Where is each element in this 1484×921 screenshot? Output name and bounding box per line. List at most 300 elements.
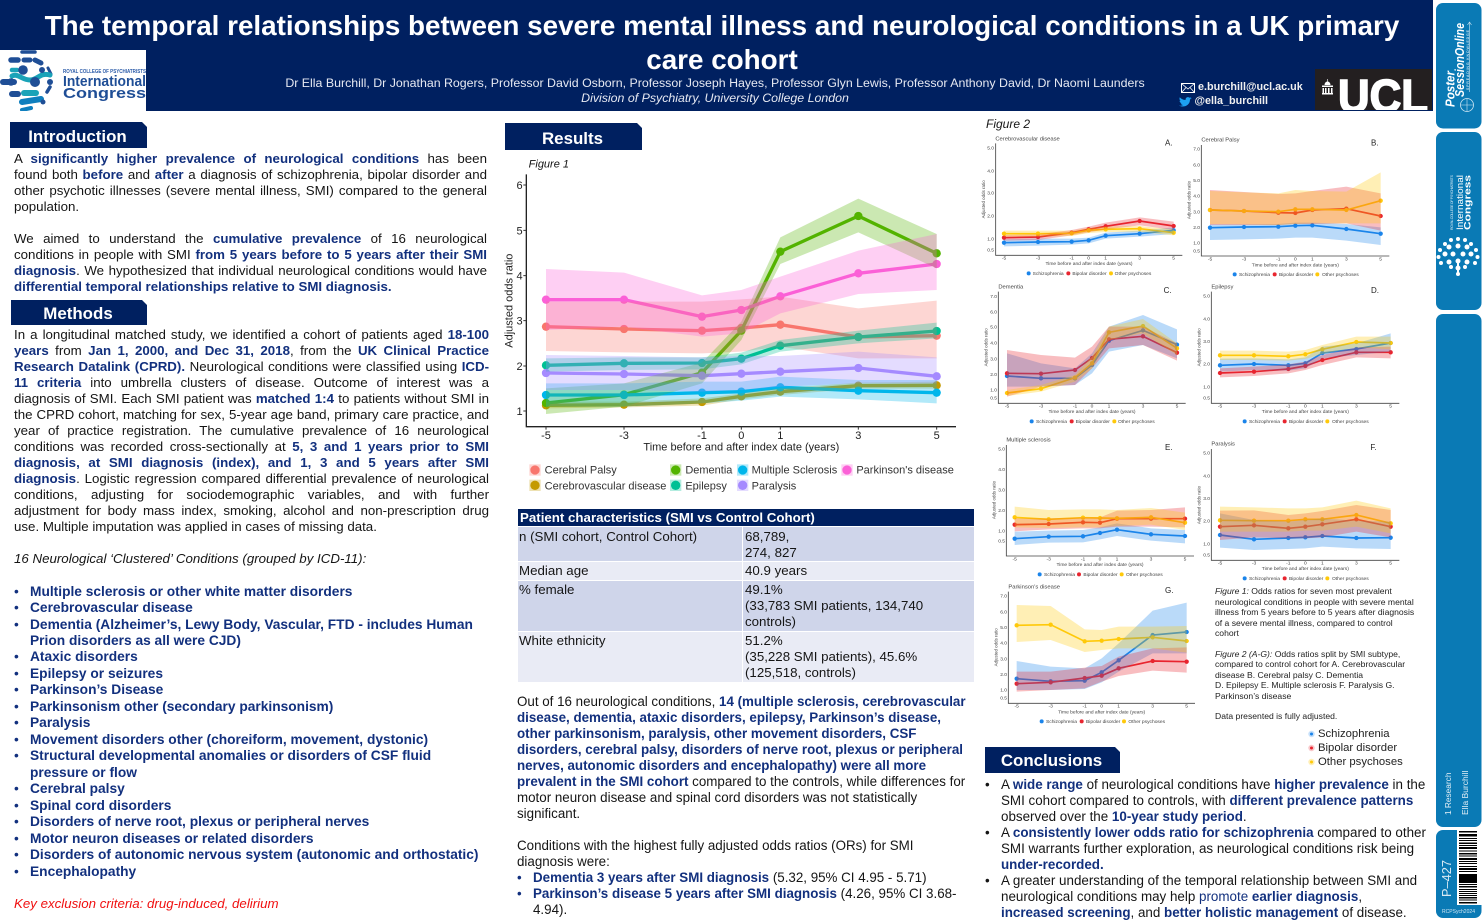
text block: introduction: We aimed to understand the cumulative prevalence of 16 neurological	[14, 231, 487, 246]
chart: G Parkinson's disease: Adjusted odds ratio	[993, 628, 998, 666]
text block: conclusions: A wide range of neurological conditions have higher prevalence in the	[1001, 777, 1425, 792]
title: care cohort	[646, 44, 798, 75]
figure captions: D. Epilepsy E. Multiple sclerosis F. Paralysis G.	[1215, 680, 1395, 690]
text block: introduction: diagnosis. We hypothesized that individual neurological conditions would have	[14, 263, 487, 278]
text block: conclusions: SMI cohort compared to controls, with different prevalence patterns	[1001, 793, 1413, 808]
list: neurological conditions: •	[14, 864, 19, 879]
text block: methods: diagnosis of SMI. Each SMI patient was matched 1:4 to patients without SMI in	[14, 391, 489, 406]
chart: B cerebral palsy: Schizophrenia	[1239, 272, 1270, 278]
chart: B cerebral palsy: 3.0	[1193, 209, 1200, 215]
chart: F paralysis: F.	[1370, 443, 1377, 452]
sidebar: poster session panels	[1436, 3, 1482, 918]
chart: B cerebral palsy: 6.0	[1193, 162, 1200, 168]
text block: conclusions: neurological conditions may help promote earlier diagnosis,	[1001, 889, 1362, 904]
chart: B cerebral palsy: Time before and after index date (years)	[1252, 262, 1339, 268]
text block: methods: the CPRD cohort, matching for sex, 5-year age band, primary care practice, and	[14, 407, 489, 422]
chart: B cerebral palsy: 1	[1311, 256, 1314, 262]
chart: D epilepsy: Bipolar disorder	[1289, 419, 1324, 425]
chart: F paralysis: -1	[1286, 561, 1291, 567]
chart: B cerebral palsy: 5	[1379, 256, 1382, 262]
panel: Poster Session Online: Poster	[1442, 70, 1458, 107]
text block: conclusions: A consistently lower odds ratio for schizophrenia compared to other	[1001, 825, 1426, 840]
panel: poster number and barcode: P–427	[1439, 860, 1454, 897]
x tick labels	[541, 430, 940, 442]
chart: F paralysis: 5.0	[1203, 451, 1210, 457]
chart: F paralysis: Schizophrenia	[1249, 576, 1280, 582]
chart: A cerebrovascular disease: Adjusted odds ratio	[981, 180, 986, 218]
panel: topic and author	[1436, 314, 1482, 827]
table: patient characteristics: (35,228 SMI patients), 45.6%	[745, 649, 917, 664]
list: neurological conditions: pressure or flow	[30, 765, 137, 780]
logo wordmark	[63, 69, 147, 102]
chart: G Parkinson's disease	[993, 584, 1195, 725]
chart: G Parkinson's disease: 2.0	[1000, 672, 1007, 678]
text block: results summary: Conditions with the highest fully adjusted odds ratios (ORs) for SMI	[517, 838, 914, 853]
chart: G Parkinson's disease: G.	[1165, 586, 1173, 595]
table: patient characteristics: 274, 827	[745, 545, 797, 560]
chart: C dementia: 0	[1091, 404, 1094, 410]
list: neurological conditions: Ataxic disorders	[30, 649, 138, 664]
chart: C dementia: 2.0	[990, 372, 997, 378]
legend: Paralysis	[752, 480, 797, 492]
text block: conclusions: under-recorded.	[1001, 857, 1104, 872]
figure captions: compared to control cohort for A. Cerebrovascular	[1215, 659, 1405, 669]
figure captions: Figure 1: Odds ratios for seven most prevalent	[1215, 586, 1392, 596]
chart: C dementia: 5.0	[990, 325, 997, 331]
chart: G Parkinson's disease: 1.0	[1000, 688, 1007, 694]
icon: twitter	[1179, 97, 1192, 106]
figure captions: of a severe mental illness, compared to control	[1215, 618, 1393, 628]
chart: F paralysis: Other psychoses	[1332, 576, 1369, 582]
text block: results summary: Parkinson’s disease 5 years after SMI diagnosis (4.26, 95% CI 3.68-	[533, 886, 957, 901]
icon: globe of dots	[1436, 237, 1480, 276]
list: neurological conditions: •	[14, 617, 19, 632]
chart: A cerebrovascular disease: Other psychoses	[1115, 271, 1152, 277]
chart: D epilepsy: -5	[1218, 404, 1222, 410]
y tick labels: 4	[517, 271, 523, 283]
heading: Introduction	[10, 122, 147, 148]
text block: methods	[14, 327, 489, 566]
list: neurological conditions: Paralysis	[30, 715, 90, 730]
chart: B cerebral palsy: Bipolar disorder	[1279, 272, 1314, 278]
chart: G Parkinson's disease: 5.0	[1000, 625, 1007, 631]
chart: G Parkinson's disease: Other psychoses	[1128, 719, 1166, 725]
table: patient characteristics: 68,789,	[745, 529, 789, 544]
chart: F paralysis: 3	[1355, 561, 1358, 567]
title	[44, 10, 1400, 75]
chart: B cerebral palsy: -3	[1242, 256, 1246, 262]
barcode	[1459, 831, 1477, 904]
list: neurological conditions: •	[14, 814, 19, 829]
chart: A cerebrovascular disease: A.	[1165, 139, 1173, 148]
x tick labels: -3	[619, 430, 629, 442]
legend: Multiple Sclerosis	[752, 465, 838, 477]
table: patient characteristics: n (SMI cohort, Control Cohort)	[519, 529, 697, 544]
text block: results summary	[517, 694, 966, 917]
chart: F paralysis: -5	[1218, 561, 1222, 567]
list: neurological conditions: Spinal cord disorders	[30, 798, 171, 813]
panel: International Congress: International	[1455, 175, 1466, 230]
chart: C dementia: Time before and after index date (years)	[1048, 409, 1136, 415]
text block: methods: In a longitudinal matched study, we identified a cohort of patients aged 18-100	[14, 327, 489, 342]
table: patient characteristics: 49.1%	[745, 582, 783, 597]
chart: B cerebral palsy: Other psychoses	[1322, 272, 1359, 278]
chart: F paralysis: Paralysis	[1211, 441, 1235, 447]
text block: methods: diagnosis, at SMI diagnosis (index), and 1, 3 and 5 years after SMI	[14, 455, 489, 470]
chart: D epilepsy: Epilepsy	[1211, 284, 1233, 290]
authors and affiliation	[285, 76, 1145, 105]
list: neurological conditions: Epilepsy or seizures	[30, 666, 163, 681]
text block: conclusions: observed over the 10-year study period.	[1001, 809, 1247, 824]
chart: D epilepsy: 3	[1355, 404, 1358, 410]
panel: topic and author: 1 Research	[1443, 772, 1453, 815]
chart: F paralysis: 0	[1304, 561, 1307, 567]
text block: methods: 11 criteria into umbrella clusters of disease. Outcome of interest was a	[14, 375, 489, 390]
text block: conclusions: SMI warrants further exploration, as neurological conditions risk being	[1001, 841, 1414, 856]
chart: E multiple sclerosis: 3	[1150, 556, 1153, 562]
chart: D epilepsy: 5	[1389, 404, 1392, 410]
chart: A cerebrovascular disease: Schizophrenia	[1033, 271, 1064, 277]
chart: B cerebral palsy: 0.5	[1193, 249, 1200, 255]
list: neurological conditions: •	[14, 732, 19, 747]
heading: Methods: Methods	[43, 304, 113, 323]
x tick labels: 5	[934, 430, 940, 442]
chart: G Parkinson's disease: Schizophrenia	[1046, 719, 1077, 725]
heading: Conclusions: Conclusions	[1001, 751, 1102, 770]
authors and affiliation: Division of Psychiatry, University College London	[581, 91, 849, 105]
chart: C dementia: 1.0	[990, 388, 997, 394]
text block: results summary: disorders, cerebral palsy, disorders of nerve root, plexus or peripheral	[517, 742, 963, 757]
chart: D epilepsy	[1196, 284, 1400, 425]
panel: poster number and barcode: RCPSych2024	[1442, 909, 1476, 915]
figure captions: Data presented is fully adjusted.	[1215, 711, 1337, 721]
text block: methods: diagnosis. Logistic regression compared differential prevalence of neurological	[14, 471, 489, 486]
legend	[529, 464, 954, 492]
chart: G Parkinson's disease: 0.5	[1000, 696, 1007, 702]
exclusion criteria note: Key exclusion criteria: drug-induced, delirium	[14, 896, 279, 911]
table: patient characteristics: % female	[519, 582, 574, 597]
figure 2 label: Figure 2	[986, 117, 1030, 131]
text block: introduction: found both before and after a diagnosis of schizophrenia, bipolar disorder and	[14, 167, 487, 182]
text block: methods: year of practice registration. The cumulative prevalence of 16 neurological	[14, 423, 489, 438]
text block: results summary: •	[517, 886, 522, 901]
icon: globe of dots	[3, 52, 53, 110]
list: neurological conditions: Cerebrovascular disease	[30, 600, 193, 615]
table: patient characteristics: White ethnicity	[519, 633, 605, 648]
text block: results summary: significant.	[517, 806, 580, 821]
chart: C dementia: Bipolar disorder	[1076, 419, 1110, 425]
legend: Parkinson's disease	[856, 465, 954, 477]
chart: F paralysis: Time before and after index date (years)	[1262, 566, 1349, 572]
table header	[518, 509, 974, 526]
chart: E multiple sclerosis: Other psychoses	[1126, 572, 1163, 578]
list: neurological conditions: •	[14, 699, 19, 714]
chart: G Parkinson's disease: 0	[1100, 704, 1103, 710]
chart: B cerebral palsy: 3	[1345, 256, 1348, 262]
chart: G Parkinson's disease: 6.0	[1000, 609, 1007, 615]
list: neurological conditions: Dementia (Alzheimer’s, Lewy Body, Vascular, FTD - includes Human	[30, 617, 473, 632]
chart: D epilepsy: 4.0	[1203, 316, 1210, 322]
chart: F paralysis: 3.0	[1203, 496, 1210, 502]
chart: D epilepsy: Schizophrenia	[1249, 419, 1280, 425]
chart: C dementia: 1	[1108, 404, 1111, 410]
list: neurological conditions: Motor neuron diseases or related disorders	[30, 831, 313, 846]
chart: D epilepsy: 3.0	[1203, 339, 1210, 345]
text block: results summary: disease, dementia, ataxic disorders, epilepsy, Parkinson’s disease,	[517, 710, 941, 725]
chart: G Parkinson's disease: 5	[1185, 704, 1188, 710]
text block: methods: adjustment for body mass index, smoking, alcohol and non-prescription drug	[14, 503, 489, 518]
chart: C dementia: -3	[1039, 404, 1043, 410]
text block: methods: years from Jan 1, 2000, and Dec 31, 2018, from the UK Clinical Practice	[14, 343, 489, 358]
chart: B cerebral palsy: 7.0	[1193, 147, 1200, 153]
text block: introduction: A significantly higher prevalence of neurological conditions has been	[14, 151, 487, 166]
confidence ribbons	[546, 199, 937, 414]
contact details: @ella_burchill	[1194, 95, 1268, 107]
y tick labels: 6	[517, 180, 523, 192]
chart: E multiple sclerosis	[991, 438, 1194, 578]
text block: results summary: nerves, autonomic disorders and encephalopathy) were all more	[517, 758, 926, 773]
chart: E multiple sclerosis: 1	[1116, 556, 1119, 562]
list: neurological conditions: •	[14, 748, 19, 763]
chart: C dementia: Dementia	[998, 284, 1024, 290]
figure label: Figure 1	[529, 159, 569, 171]
figure captions	[1215, 586, 1414, 721]
chart: E multiple sclerosis: -1	[1081, 556, 1085, 562]
chart: G Parkinson's disease: Parkinson's disease	[1008, 584, 1060, 590]
chart: D epilepsy: -1	[1286, 404, 1291, 410]
x tick labels: -5	[541, 430, 551, 442]
chart: D epilepsy: Time before and after index date (years)	[1262, 409, 1349, 415]
text block: methods: use. Multiple imputation was applied in cases of missing data.	[14, 519, 377, 534]
chart: C dementia: Schizophrenia	[1036, 419, 1067, 425]
text block: results summary: prevalent in the SMI cohort compared to the controls, while differences for	[517, 774, 965, 789]
text block: results summary: •	[517, 870, 522, 885]
table: patient characteristics: 51.2%	[745, 633, 783, 648]
list: neurological conditions: •	[14, 600, 19, 615]
text block: results summary: motor neuron disease and spinal cord disorders was not statistically	[517, 790, 917, 805]
list: neurological conditions: •	[14, 715, 19, 730]
chart: F paralysis: 5	[1389, 561, 1392, 567]
icon: email	[1181, 83, 1195, 93]
legend: Cerebrovascular disease	[545, 480, 666, 492]
series lines	[546, 216, 937, 405]
list: neurological conditions: •	[14, 682, 19, 697]
chart: D epilepsy: 5.0	[1203, 294, 1210, 300]
chart: A cerebrovascular disease: -5	[1002, 255, 1006, 261]
chart: G Parkinson's disease: 3	[1151, 704, 1154, 710]
heading: Introduction: Introduction	[28, 127, 127, 146]
chart: E multiple sclerosis: 4.0	[998, 467, 1005, 473]
list: neurological conditions: Cerebral palsy	[30, 781, 125, 796]
text block: methods: conditions, adjusting for sociodemographic variables, and with further	[14, 487, 489, 502]
text block: methods: Research Datalink (CPRD). Neurological conditions were classified using ICD-	[14, 359, 489, 374]
text block: introduction: differential temporal relationships relative to SMI diagnosis.	[14, 279, 392, 294]
text block: results summary: 4.94).	[533, 902, 567, 917]
header band	[0, 0, 1433, 111]
table: patient characteristics: (125,518, controls)	[745, 665, 856, 680]
logo wordmark: Congress	[63, 85, 146, 102]
chart: B cerebral palsy: 5.0	[1193, 178, 1200, 184]
chart: A cerebrovascular disease: 5	[1172, 255, 1175, 261]
text block: methods: 16 Neurological ‘Clustered’ Conditions (grouped by ICD-11):	[14, 551, 366, 566]
chart: E multiple sclerosis: 0	[1099, 556, 1102, 562]
heading: Results: Results	[542, 129, 603, 148]
chart: E multiple sclerosis: E.	[1165, 443, 1173, 452]
chart: B cerebral palsy: Cerebral Palsy	[1201, 137, 1240, 143]
figure captions: illness from 5 years before to 5 years after diagnosis	[1215, 607, 1414, 617]
chart: E multiple sclerosis: Adjusted odds ratio	[991, 480, 996, 519]
chart: B cerebral palsy: 1.0	[1193, 241, 1200, 247]
chart: Figure 1 odds ratios	[504, 159, 956, 492]
text block: conclusions: •	[985, 873, 990, 888]
x tick labels: 3	[855, 430, 861, 442]
text block: introduction: population.	[14, 199, 79, 214]
text block: introduction: other psychotic illnesses (severe mental illness, SMI) compared to the general	[14, 183, 487, 198]
legend: SMI subtypes	[1308, 728, 1403, 768]
panel: Poster Session Online	[1436, 3, 1482, 128]
text block: results summary: other parkinsonism, paralysis, other movement disorders, CSF	[517, 726, 916, 741]
y tick labels: 3	[517, 316, 523, 328]
chart: F paralysis: 1	[1321, 561, 1324, 567]
chart: C dementia: C.	[1164, 286, 1172, 295]
chart: E multiple sclerosis: 2.0	[998, 508, 1005, 514]
text block: results summary: Dementia 3 years after SMI diagnosis (5.32, 95% CI 4.95 - 5.71)	[533, 870, 927, 885]
legend: SMI subtypes: Other psychoses	[1318, 756, 1403, 768]
text block: methods: conditions was recorded cross-sectionally at 5, 3 and 1 years prior to SMI	[14, 439, 489, 454]
table: patient characteristics: controls)	[745, 614, 796, 629]
contact details	[1179, 81, 1303, 107]
chart: G Parkinson's disease: -1	[1082, 704, 1087, 710]
list: neurological conditions: •	[14, 831, 19, 846]
table: patient characteristics: 40.9 years	[745, 563, 807, 578]
chart: D epilepsy: 0.5	[1203, 396, 1210, 402]
chart: D epilepsy: 2.0	[1203, 362, 1210, 368]
chart: G Parkinson's disease: Bipolar disorder	[1086, 719, 1121, 725]
chart: B cerebral palsy: -1	[1276, 256, 1281, 262]
chart: E multiple sclerosis: Multiple sclerosis	[1006, 438, 1051, 444]
chart: F paralysis: 4.0	[1203, 473, 1210, 479]
text block: results summary: Out of 16 neurological conditions, 14 (multiple sclerosis, cerebrovascular	[517, 694, 966, 709]
chart: A cerebrovascular disease	[981, 136, 1182, 277]
y tick labels: 2	[517, 361, 523, 373]
chart: E multiple sclerosis: Bipolar disorder	[1083, 572, 1118, 578]
chart: C dementia: 4.0	[990, 341, 997, 347]
text block: conclusions: increased screening, and better holistic management of disease.	[1001, 905, 1407, 920]
text block: conclusions: •	[985, 825, 990, 840]
chart: E multiple sclerosis: 3.0	[998, 487, 1005, 493]
panel: International Congress: ROYAL COLLEGE OF PSYCHIATRISTS	[1450, 174, 1454, 230]
chart: F paralysis: Bipolar disorder	[1289, 576, 1324, 582]
axes	[526, 174, 956, 427]
list: neurological conditions: Disorders of nerve root, plexus or peripheral nerves	[30, 814, 369, 829]
chart: C dementia: -1	[1073, 404, 1077, 410]
list: neurological conditions: Encephalopathy	[30, 864, 136, 879]
chart: G Parkinson's disease: Time before and after index date (years)	[1058, 709, 1146, 715]
list: neurological conditions: •	[14, 649, 19, 664]
chart: A cerebrovascular disease: -1	[1069, 255, 1074, 261]
chart: A cerebrovascular disease: 5.0	[987, 146, 994, 152]
y tick labels: 5	[517, 225, 523, 237]
chart: B cerebral palsy: 4.0	[1193, 194, 1200, 200]
text block: conclusions: •	[985, 777, 990, 792]
title: The temporal relationships between severe mental illness and neurological conditions in a UK primary	[45, 10, 1399, 41]
chart: F paralysis: 1.0	[1203, 541, 1210, 547]
figure captions: disease B. Cerebral palsy C. Dementia	[1215, 670, 1363, 680]
chart: A cerebrovascular disease: Bipolar disorder	[1072, 271, 1107, 277]
chart: E multiple sclerosis: Schizophrenia	[1044, 572, 1075, 578]
chart: C dementia: -5	[1005, 404, 1009, 410]
panel: International Congress: Congress	[1462, 175, 1474, 230]
list: neurological conditions: Disorders of autonomic nervous system (autonomic and orthostatic)	[30, 847, 478, 862]
text block: introduction	[14, 151, 487, 294]
text block: conclusions	[985, 777, 1426, 920]
chart: A cerebrovascular disease: -3	[1036, 255, 1040, 261]
chart: D epilepsy: D.	[1371, 286, 1379, 295]
chart: E multiple sclerosis: 0.5	[998, 538, 1005, 544]
chart: G Parkinson's disease: 7.0	[1000, 594, 1007, 600]
chart: C dementia: 5	[1176, 404, 1179, 410]
chart: C dementia: Adjusted odds ratio	[983, 328, 988, 366]
chart: E multiple sclerosis: 1.0	[998, 528, 1005, 534]
contact details: e.burchill@ucl.ac.uk	[1198, 81, 1303, 93]
list: neurological conditions: •	[14, 847, 19, 862]
chart: B cerebral palsy	[1187, 137, 1390, 278]
chart: F paralysis: 0.5	[1203, 553, 1210, 559]
chart: G Parkinson's disease: -3	[1048, 704, 1053, 710]
table: patient characteristics	[518, 509, 974, 682]
heading: Conclusions	[985, 747, 1120, 773]
heading: Methods	[11, 300, 147, 325]
figure captions: cohort	[1215, 628, 1239, 638]
chart: G Parkinson's disease: -5	[1014, 704, 1019, 710]
text block: conclusions: A greater understanding of the temporal relationship between SMI and	[1001, 873, 1417, 888]
chart: D epilepsy: Other psychoses	[1332, 419, 1369, 425]
chart: C dementia: Other psychoses	[1118, 419, 1155, 425]
list: neurological conditions	[14, 584, 478, 879]
RCPsych International Congress logo	[0, 50, 146, 111]
list: neurological conditions: •	[14, 798, 19, 813]
chart: D epilepsy: 1	[1321, 404, 1324, 410]
list: neurological conditions: Prion disorders as all were CJD)	[30, 633, 241, 648]
figure captions: Parkinson’s disease	[1215, 690, 1291, 700]
chart: B cerebral palsy: -5	[1208, 256, 1212, 262]
legend: Epilepsy	[685, 480, 727, 492]
chart: A cerebrovascular disease: Time before and after index date (years)	[1045, 261, 1133, 267]
authors and affiliation: Dr Ella Burchill, Dr Jonathan Rogers, Professor David Osborn, Professor Joseph Hayes, Professor Glyn Lewis, Professor Anthony David, Dr Naomi Launders	[285, 76, 1145, 90]
chart: C dementia: 7.0	[990, 294, 997, 300]
list: neurological conditions: •	[14, 584, 19, 599]
chart: C dementia: 3	[1142, 404, 1145, 410]
legend: Dementia	[685, 465, 733, 477]
table: patient characteristics: Median age	[519, 563, 588, 578]
chart: A cerebrovascular disease: 4.0	[987, 168, 994, 174]
text: Adjusted odds ratio	[1187, 180, 1192, 219]
legend: SMI subtypes: Schizophrenia	[1318, 728, 1390, 740]
chart: E multiple sclerosis: Time before and after index date (years)	[1056, 562, 1144, 568]
list: neurological conditions: Multiple sclerosis or other white matter disorders	[30, 584, 352, 599]
list: neurological conditions: Structural developmental anomalies or disorders of CSF fluid	[30, 748, 431, 763]
chart: F paralysis: 2.0	[1203, 519, 1210, 525]
list: neurological conditions: •	[14, 781, 19, 796]
panel: Poster Session Online: SessionOnline	[1452, 23, 1467, 97]
figure captions: Figure 2 (A-G): Odds ratios split by SMI subtype,	[1215, 648, 1400, 658]
chart: A cerebrovascular disease: 3	[1138, 255, 1141, 261]
chart: A cerebrovascular disease: 2.0	[987, 214, 994, 220]
chart: Figure 1 odds ratios: Adjusted odds ratio	[504, 254, 516, 348]
chart: C dementia: 6.0	[990, 309, 997, 315]
list: neurological conditions: Parkinsonism other (secondary parkinsonism)	[30, 699, 333, 714]
x tick labels: 0	[738, 430, 744, 442]
